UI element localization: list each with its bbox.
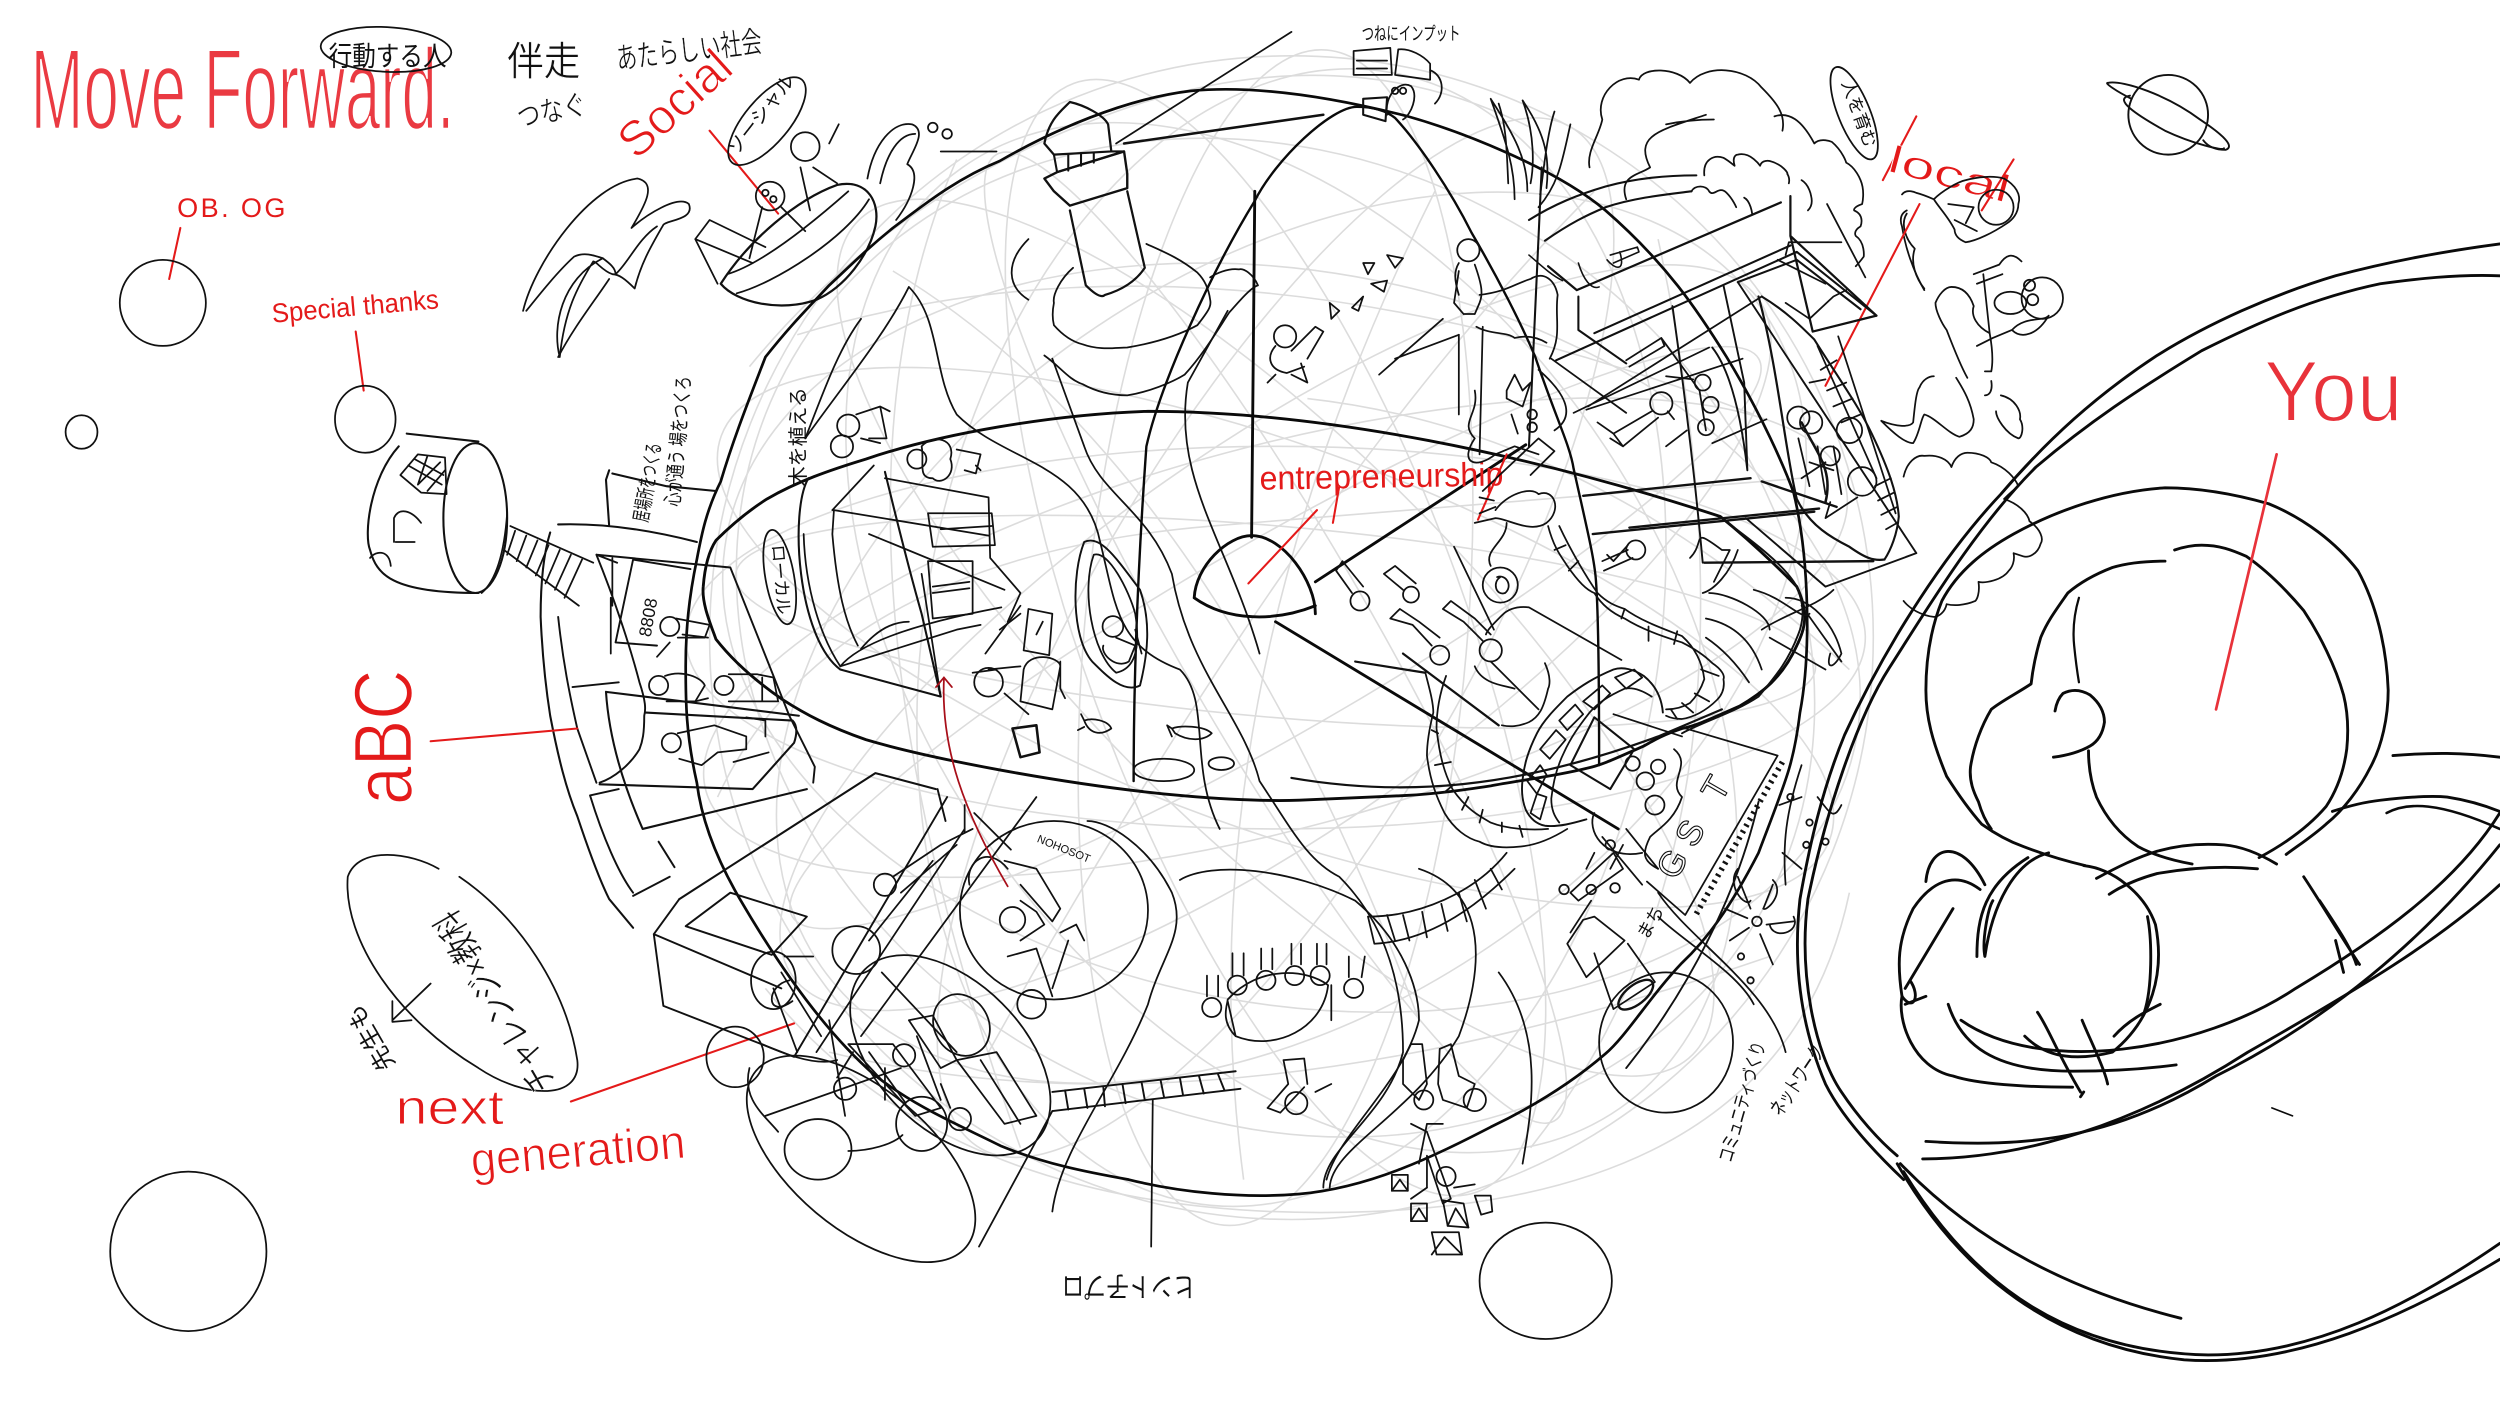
oval note: challenge and subject: チャレンジ×教科 — [428, 903, 563, 1099]
hooded person and glasses figure on clouds — [1934, 177, 2063, 346]
planet outline — [686, 89, 1807, 1196]
heavy lines across ring machine — [1291, 709, 1759, 1068]
small empty circle — [66, 415, 97, 449]
flower doodles near right edge — [1658, 765, 1841, 1004]
oval note: social — [715, 65, 819, 177]
note: people who act, in an oval: 行動する人 — [329, 40, 447, 71]
tilted building with rooms and ladder — [1529, 175, 1916, 587]
label: next generation with leader: generation — [468, 1116, 687, 1187]
note: accompany and connect: つなぐ — [514, 89, 589, 135]
small robot figure — [1559, 840, 1623, 933]
figures on the hill — [831, 406, 981, 481]
label: aBC with leader: aBC — [337, 670, 430, 805]
note: accompany and connect — [507, 40, 589, 135]
equator ellipse band — [703, 411, 1805, 801]
central building with windows — [799, 465, 1020, 697]
label: Social with leader — [607, 39, 778, 214]
classroom circle with desks — [813, 918, 1088, 1193]
title: Move Forward: Move Forward. — [31, 26, 455, 154]
hammock sling under baby — [1923, 806, 2500, 1159]
mouse with spiral tail — [1475, 491, 1555, 603]
label: entrepreneurship with dome: entrepreneurship — [1259, 456, 1504, 498]
wing swoosh sketch — [523, 179, 690, 357]
note: people who act, in an oval — [320, 24, 452, 75]
grass tuft — [1491, 99, 1570, 207]
aBC curved band with rooms — [541, 470, 936, 928]
label: Social with leader: Social — [607, 39, 743, 169]
note: town text near flowers: まち — [1633, 902, 1668, 943]
capsule pod — [1486, 607, 1621, 726]
dark red arrow to the building — [936, 677, 1008, 886]
note: community, lower right rotated text — [1715, 1039, 1830, 1165]
notes: making a place, vertical text — [630, 375, 696, 524]
bottom ladder — [1052, 1071, 1240, 1111]
label: local with leader — [1825, 116, 2015, 386]
circle with OB OG label: OB. OG — [177, 192, 288, 223]
large empty circle lower left — [110, 1172, 266, 1331]
label: aBC with leader — [337, 670, 577, 805]
oval note: personal growth: 人を育む — [1838, 77, 1880, 150]
label: local with leader: local — [1884, 138, 2015, 211]
oval note: social: ソーシャル — [724, 71, 799, 159]
note: community, lower right rotated text: コミュニティづくり — [1715, 1039, 1770, 1165]
people in the centre-right field — [1336, 540, 1645, 725]
label: next generation with leader — [396, 1023, 794, 1187]
spotlight and planet circle — [1567, 917, 1733, 1113]
note: community, lower right rotated text: ネットワーク — [1766, 1041, 1830, 1120]
climbing figures and picture frames — [1392, 1044, 1492, 1255]
leaf-shaped boat with person — [1075, 540, 1147, 688]
ringed planet — [2107, 75, 2229, 155]
lighthouse — [1012, 32, 1323, 395]
curved conveyor and big ring machine — [1425, 668, 1682, 854]
oval note: personal growth — [1821, 61, 1887, 165]
arrow and note from oval: 先生も — [342, 1000, 401, 1075]
turret tower — [368, 434, 507, 593]
game card with letters GST — [1645, 727, 1782, 917]
bridge ladder from tower to planet — [504, 526, 593, 606]
curved ladder to lower right — [1368, 853, 1515, 944]
circle at the bottom — [1480, 1223, 1612, 1339]
grey sketch guide scribbles of the planet — [553, 0, 1998, 1331]
arrow and note from oval — [342, 984, 431, 1075]
standing person with scattered cards — [1268, 239, 1482, 383]
oval note: local: ローカル — [768, 544, 794, 615]
circle with OB OG label — [120, 192, 288, 346]
note: ob og doodle text near band: 8808 — [635, 596, 661, 638]
note: a new society: あたらしい社会 — [614, 25, 764, 76]
cylinder and circles of the school — [706, 926, 1052, 1301]
TOSHOKAN circle with reader — [869, 805, 1148, 1019]
next-generation box — [654, 789, 1036, 1057]
ground contour lines across the planet — [805, 287, 1786, 1212]
vertical leader and note at bottom: ヒント子プロ — [1062, 1271, 1196, 1302]
TOSHOKAN circle with reader: NOHOSOT — [1035, 833, 1092, 866]
label: entrepreneurship with dome — [1194, 191, 1618, 829]
circle with special thanks label: Special thanks — [270, 283, 440, 329]
giant egg shell around the baby — [1797, 244, 2500, 1361]
notes: making a place, vertical text: 心が通う 場をつくろ — [661, 375, 696, 507]
note: accompany and connect: 伴走 — [507, 40, 580, 84]
splash tree and trunk at centre right — [1379, 167, 1566, 491]
note: always input: つねにインプット — [1362, 23, 1460, 44]
baby helmet and head — [1926, 488, 2500, 894]
cloud trees at upper right — [1589, 70, 2042, 617]
label: You with leader: You — [2264, 344, 2403, 440]
note: plant a tree: 木を植える — [787, 387, 810, 486]
label: next generation with leader: next — [396, 1080, 504, 1135]
oval note: local — [757, 527, 802, 627]
game card with letters GST: GS T — [1649, 769, 1738, 886]
dragon tail track — [1548, 520, 1841, 733]
top figure with reading boards — [1354, 48, 1442, 121]
notes: making a place, vertical text: 居場所をつくる — [630, 441, 666, 524]
label: You with leader — [2216, 344, 2403, 709]
circle with special thanks label — [270, 283, 440, 453]
meridian arch — [1134, 107, 1599, 781]
people near central building — [974, 609, 1065, 757]
baby body, knees and fist — [1899, 851, 2359, 1097]
cake table with figures — [1202, 944, 1365, 1114]
teapot boat with person — [695, 123, 997, 305]
figures in the aBC rooms — [649, 617, 778, 765]
fish doodles — [1078, 714, 1234, 781]
